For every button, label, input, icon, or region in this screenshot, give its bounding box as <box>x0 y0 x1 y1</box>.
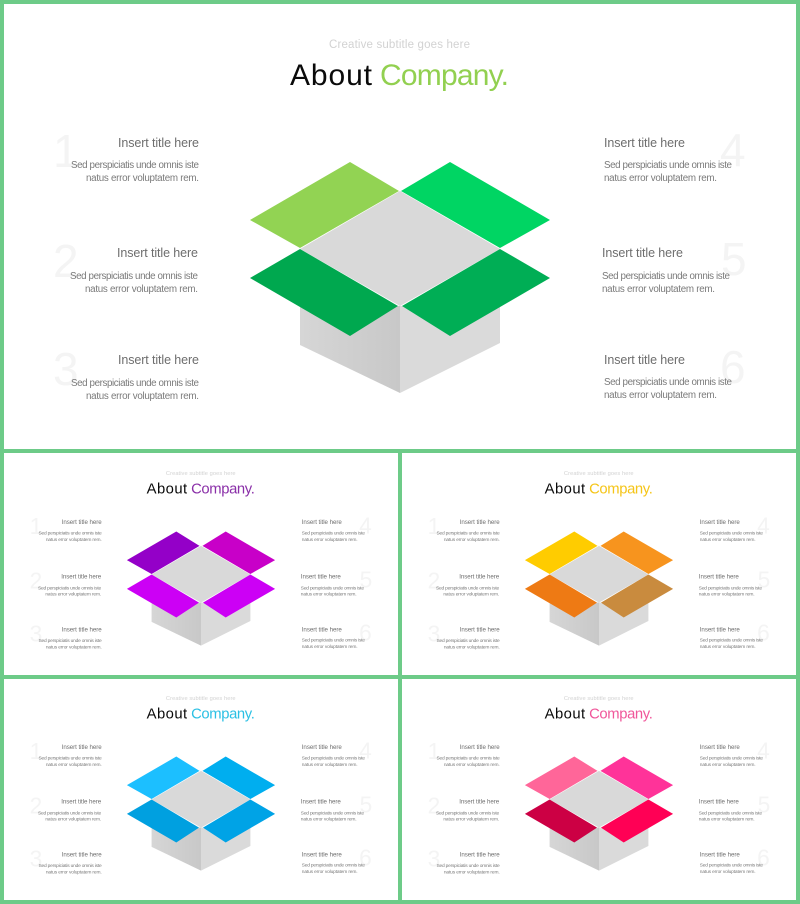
item 3: natus error voluptatem rem. <box>86 391 199 402</box>
item 2: Sed perspiciatis unde omnis iste <box>70 271 199 282</box>
item 2 <box>30 792 102 823</box>
item 5: 5 <box>360 566 372 592</box>
icon: open box <box>127 532 275 646</box>
panel: blue slide <box>30 696 372 876</box>
item 4: natus error voluptatem rem. <box>604 173 717 184</box>
title <box>147 706 255 722</box>
item 1 <box>30 513 102 543</box>
item 6: natus error voluptatem rem. <box>302 869 358 875</box>
item 6: Insert title here <box>604 353 685 367</box>
item 2 <box>53 235 199 295</box>
item 5 <box>301 791 372 823</box>
panel: orange slide <box>428 471 770 651</box>
item 3 <box>428 621 500 651</box>
title: About <box>545 481 585 497</box>
item 5: Sed perspiciatis unde omnis iste <box>602 271 731 282</box>
item 4 <box>302 738 372 768</box>
item 6: Insert title here <box>700 626 740 633</box>
item 4: Sed perspiciatis unde omnis iste <box>302 755 365 761</box>
subtitle: Creative subtitle goes here <box>564 696 634 702</box>
item 3: Insert title here <box>118 353 199 367</box>
item 3: Insert title here <box>62 626 102 633</box>
item 4: Insert title here <box>604 136 685 150</box>
item 4: natus error voluptatem rem. <box>700 762 756 768</box>
item 4: 4 <box>757 513 770 539</box>
item 4 <box>700 738 770 768</box>
item 6: 6 <box>359 620 372 646</box>
panel: purple slide <box>30 471 372 651</box>
item 5: Sed perspiciatis unde omnis iste <box>301 810 364 816</box>
item 2: Insert title here <box>61 573 102 580</box>
item 4 <box>700 513 770 543</box>
item 3: Insert title here <box>62 851 102 858</box>
icon: open box <box>127 757 275 871</box>
title: Company. <box>191 481 255 497</box>
item 6: Sed perspiciatis unde omnis iste <box>604 377 733 388</box>
item 2: Insert title here <box>459 573 500 580</box>
item 6: 6 <box>757 845 770 871</box>
item 5: Insert title here <box>301 798 341 805</box>
item 2: 2 <box>428 792 440 818</box>
item 1: 1 <box>53 125 79 177</box>
item 1 <box>30 738 102 768</box>
item 1: Sed perspiciatis unde omnis iste <box>38 755 102 761</box>
item 3: Sed perspiciatis unde omnis iste <box>71 378 200 389</box>
item 4: 4 <box>359 513 372 539</box>
item 4 <box>302 513 372 543</box>
item 1: natus error voluptatem rem. <box>46 762 102 768</box>
item 5: Sed perspiciatis unde omnis iste <box>301 585 364 591</box>
item 5: Insert title here <box>699 573 739 580</box>
title: About <box>147 706 187 722</box>
item 6 <box>302 845 372 875</box>
item 2: natus error voluptatem rem. <box>85 284 198 295</box>
item 1: natus error voluptatem rem. <box>86 173 199 184</box>
item 3: 3 <box>428 621 440 647</box>
title: Company. <box>380 59 509 92</box>
item 3: Insert title here <box>460 626 500 633</box>
item 1: 1 <box>30 738 42 764</box>
item 4: 4 <box>359 738 372 764</box>
item 2 <box>428 792 500 823</box>
item 1: natus error voluptatem rem. <box>46 537 102 543</box>
item 2: Sed perspiciatis unde omnis iste <box>38 810 102 816</box>
item 5: natus error voluptatem rem. <box>301 592 357 598</box>
item 1: 1 <box>428 513 440 539</box>
item 6 <box>700 620 770 650</box>
item 4: Sed perspiciatis unde omnis iste <box>700 755 763 761</box>
item 5 <box>301 566 372 598</box>
item 5: Sed perspiciatis unde omnis iste <box>699 585 762 591</box>
item 3 <box>53 343 200 402</box>
item 4: natus error voluptatem rem. <box>302 537 358 543</box>
item 1: natus error voluptatem rem. <box>444 537 500 543</box>
title: Company. <box>191 706 255 722</box>
item 4: natus error voluptatem rem. <box>700 537 756 543</box>
item 3: 3 <box>428 846 440 872</box>
item 5: natus error voluptatem rem. <box>301 817 357 823</box>
item 3: natus error voluptatem rem. <box>46 870 102 876</box>
item 5: 5 <box>758 566 770 592</box>
item 2: Sed perspiciatis unde omnis iste <box>38 585 102 591</box>
item 1: Insert title here <box>460 519 500 526</box>
item 6: natus error voluptatem rem. <box>302 644 358 650</box>
subtitle: Creative subtitle goes here <box>166 696 236 702</box>
item 1: Insert title here <box>62 519 102 526</box>
item 1: Sed perspiciatis unde omnis iste <box>38 530 102 536</box>
item 6 <box>700 845 770 875</box>
item 2: Sed perspiciatis unde omnis iste <box>436 810 500 816</box>
item 6: Sed perspiciatis unde omnis iste <box>302 863 365 869</box>
item 1: Insert title here <box>62 744 102 751</box>
item 4: 4 <box>757 738 770 764</box>
item 6: Insert title here <box>302 626 342 633</box>
item 2: 2 <box>428 567 440 593</box>
title <box>290 59 509 92</box>
item 5: Insert title here <box>602 246 683 260</box>
item 4: natus error voluptatem rem. <box>302 762 358 768</box>
item 1: Sed perspiciatis unde omnis iste <box>71 160 200 171</box>
icon: open box <box>525 532 673 646</box>
item 6: 6 <box>359 845 372 871</box>
item 6: Sed perspiciatis unde omnis iste <box>700 863 763 869</box>
item 6: Insert title here <box>700 851 740 858</box>
title: Company. <box>589 481 653 497</box>
item 3: Sed perspiciatis unde omnis iste <box>38 638 102 644</box>
item 2: 2 <box>30 792 42 818</box>
item 5: natus error voluptatem rem. <box>699 592 755 598</box>
title <box>545 706 653 722</box>
item 2 <box>30 567 102 598</box>
item 2: Insert title here <box>459 798 500 805</box>
item 3: natus error voluptatem rem. <box>444 870 500 876</box>
subtitle: Creative subtitle goes here <box>329 39 470 51</box>
icon: open box <box>525 757 673 871</box>
item 2: 2 <box>53 235 79 287</box>
item 3: natus error voluptatem rem. <box>46 645 102 651</box>
item 2: Insert title here <box>61 798 102 805</box>
item 3: 3 <box>30 621 42 647</box>
title: Company. <box>589 706 653 722</box>
title: About <box>290 59 373 92</box>
panel: green main slide <box>53 39 747 402</box>
item 6: 6 <box>757 620 770 646</box>
item 3: 3 <box>53 343 79 395</box>
item 1: Sed perspiciatis unde omnis iste <box>436 530 500 536</box>
item 1: 1 <box>428 738 440 764</box>
item 2: 2 <box>30 567 42 593</box>
item 5: natus error voluptatem rem. <box>602 284 715 295</box>
item 6 <box>604 341 746 401</box>
item 1: Sed perspiciatis unde omnis iste <box>436 755 500 761</box>
item 4: Insert title here <box>700 519 740 526</box>
item 1 <box>428 738 500 768</box>
item 2 <box>428 567 500 598</box>
item 3: 3 <box>30 846 42 872</box>
item 5: 5 <box>360 791 372 817</box>
item 6: Insert title here <box>302 851 342 858</box>
item 5 <box>699 791 770 823</box>
item 1: natus error voluptatem rem. <box>444 762 500 768</box>
item 6: natus error voluptatem rem. <box>700 644 756 650</box>
item 2: natus error voluptatem rem. <box>443 592 499 598</box>
item 3: Sed perspiciatis unde omnis iste <box>38 863 102 869</box>
subtitle: Creative subtitle goes here <box>564 471 634 477</box>
item 5: natus error voluptatem rem. <box>699 817 755 823</box>
item 5: Insert title here <box>699 798 739 805</box>
item 3 <box>30 846 102 876</box>
title: About <box>147 481 187 497</box>
item 6: natus error voluptatem rem. <box>700 869 756 875</box>
item 4: Sed perspiciatis unde omnis iste <box>302 530 365 536</box>
item 1 <box>428 513 500 543</box>
item 3: Sed perspiciatis unde omnis iste <box>436 863 500 869</box>
item 4: Insert title here <box>302 744 342 751</box>
item 3: Sed perspiciatis unde omnis iste <box>436 638 500 644</box>
item 3 <box>428 846 500 876</box>
item 1: Insert title here <box>118 136 199 150</box>
item 6 <box>302 620 372 650</box>
title <box>147 481 255 497</box>
item 5 <box>699 566 770 598</box>
item 3: Insert title here <box>460 851 500 858</box>
item 1 <box>53 125 200 184</box>
item 3 <box>30 621 102 651</box>
title <box>545 481 653 497</box>
item 4 <box>604 124 746 184</box>
item 5: Sed perspiciatis unde omnis iste <box>699 810 762 816</box>
item 2: natus error voluptatem rem. <box>45 592 101 598</box>
item 5: 5 <box>758 791 770 817</box>
item 2: Insert title here <box>117 246 198 260</box>
item 4: Sed perspiciatis unde omnis iste <box>604 160 733 171</box>
item 1: Insert title here <box>460 744 500 751</box>
item 4: Insert title here <box>302 519 342 526</box>
item 3: natus error voluptatem rem. <box>444 645 500 651</box>
panel: pink slide <box>428 696 770 876</box>
item 5 <box>602 233 747 295</box>
item 4: 4 <box>720 124 746 176</box>
item 6: natus error voluptatem rem. <box>604 390 717 401</box>
item 5: 5 <box>721 233 747 285</box>
item 5: Insert title here <box>301 573 341 580</box>
icon: open box <box>250 162 550 393</box>
item 2: natus error voluptatem rem. <box>443 817 499 823</box>
item 2: Sed perspiciatis unde omnis iste <box>436 585 500 591</box>
subtitle: Creative subtitle goes here <box>166 471 236 477</box>
item 6: 6 <box>720 341 746 393</box>
item 4: Insert title here <box>700 744 740 751</box>
item 4: Sed perspiciatis unde omnis iste <box>700 530 763 536</box>
item 1: 1 <box>30 513 42 539</box>
item 6: Sed perspiciatis unde omnis iste <box>302 638 365 644</box>
title: About <box>545 706 585 722</box>
item 2: natus error voluptatem rem. <box>45 817 101 823</box>
item 6: Sed perspiciatis unde omnis iste <box>700 638 763 644</box>
